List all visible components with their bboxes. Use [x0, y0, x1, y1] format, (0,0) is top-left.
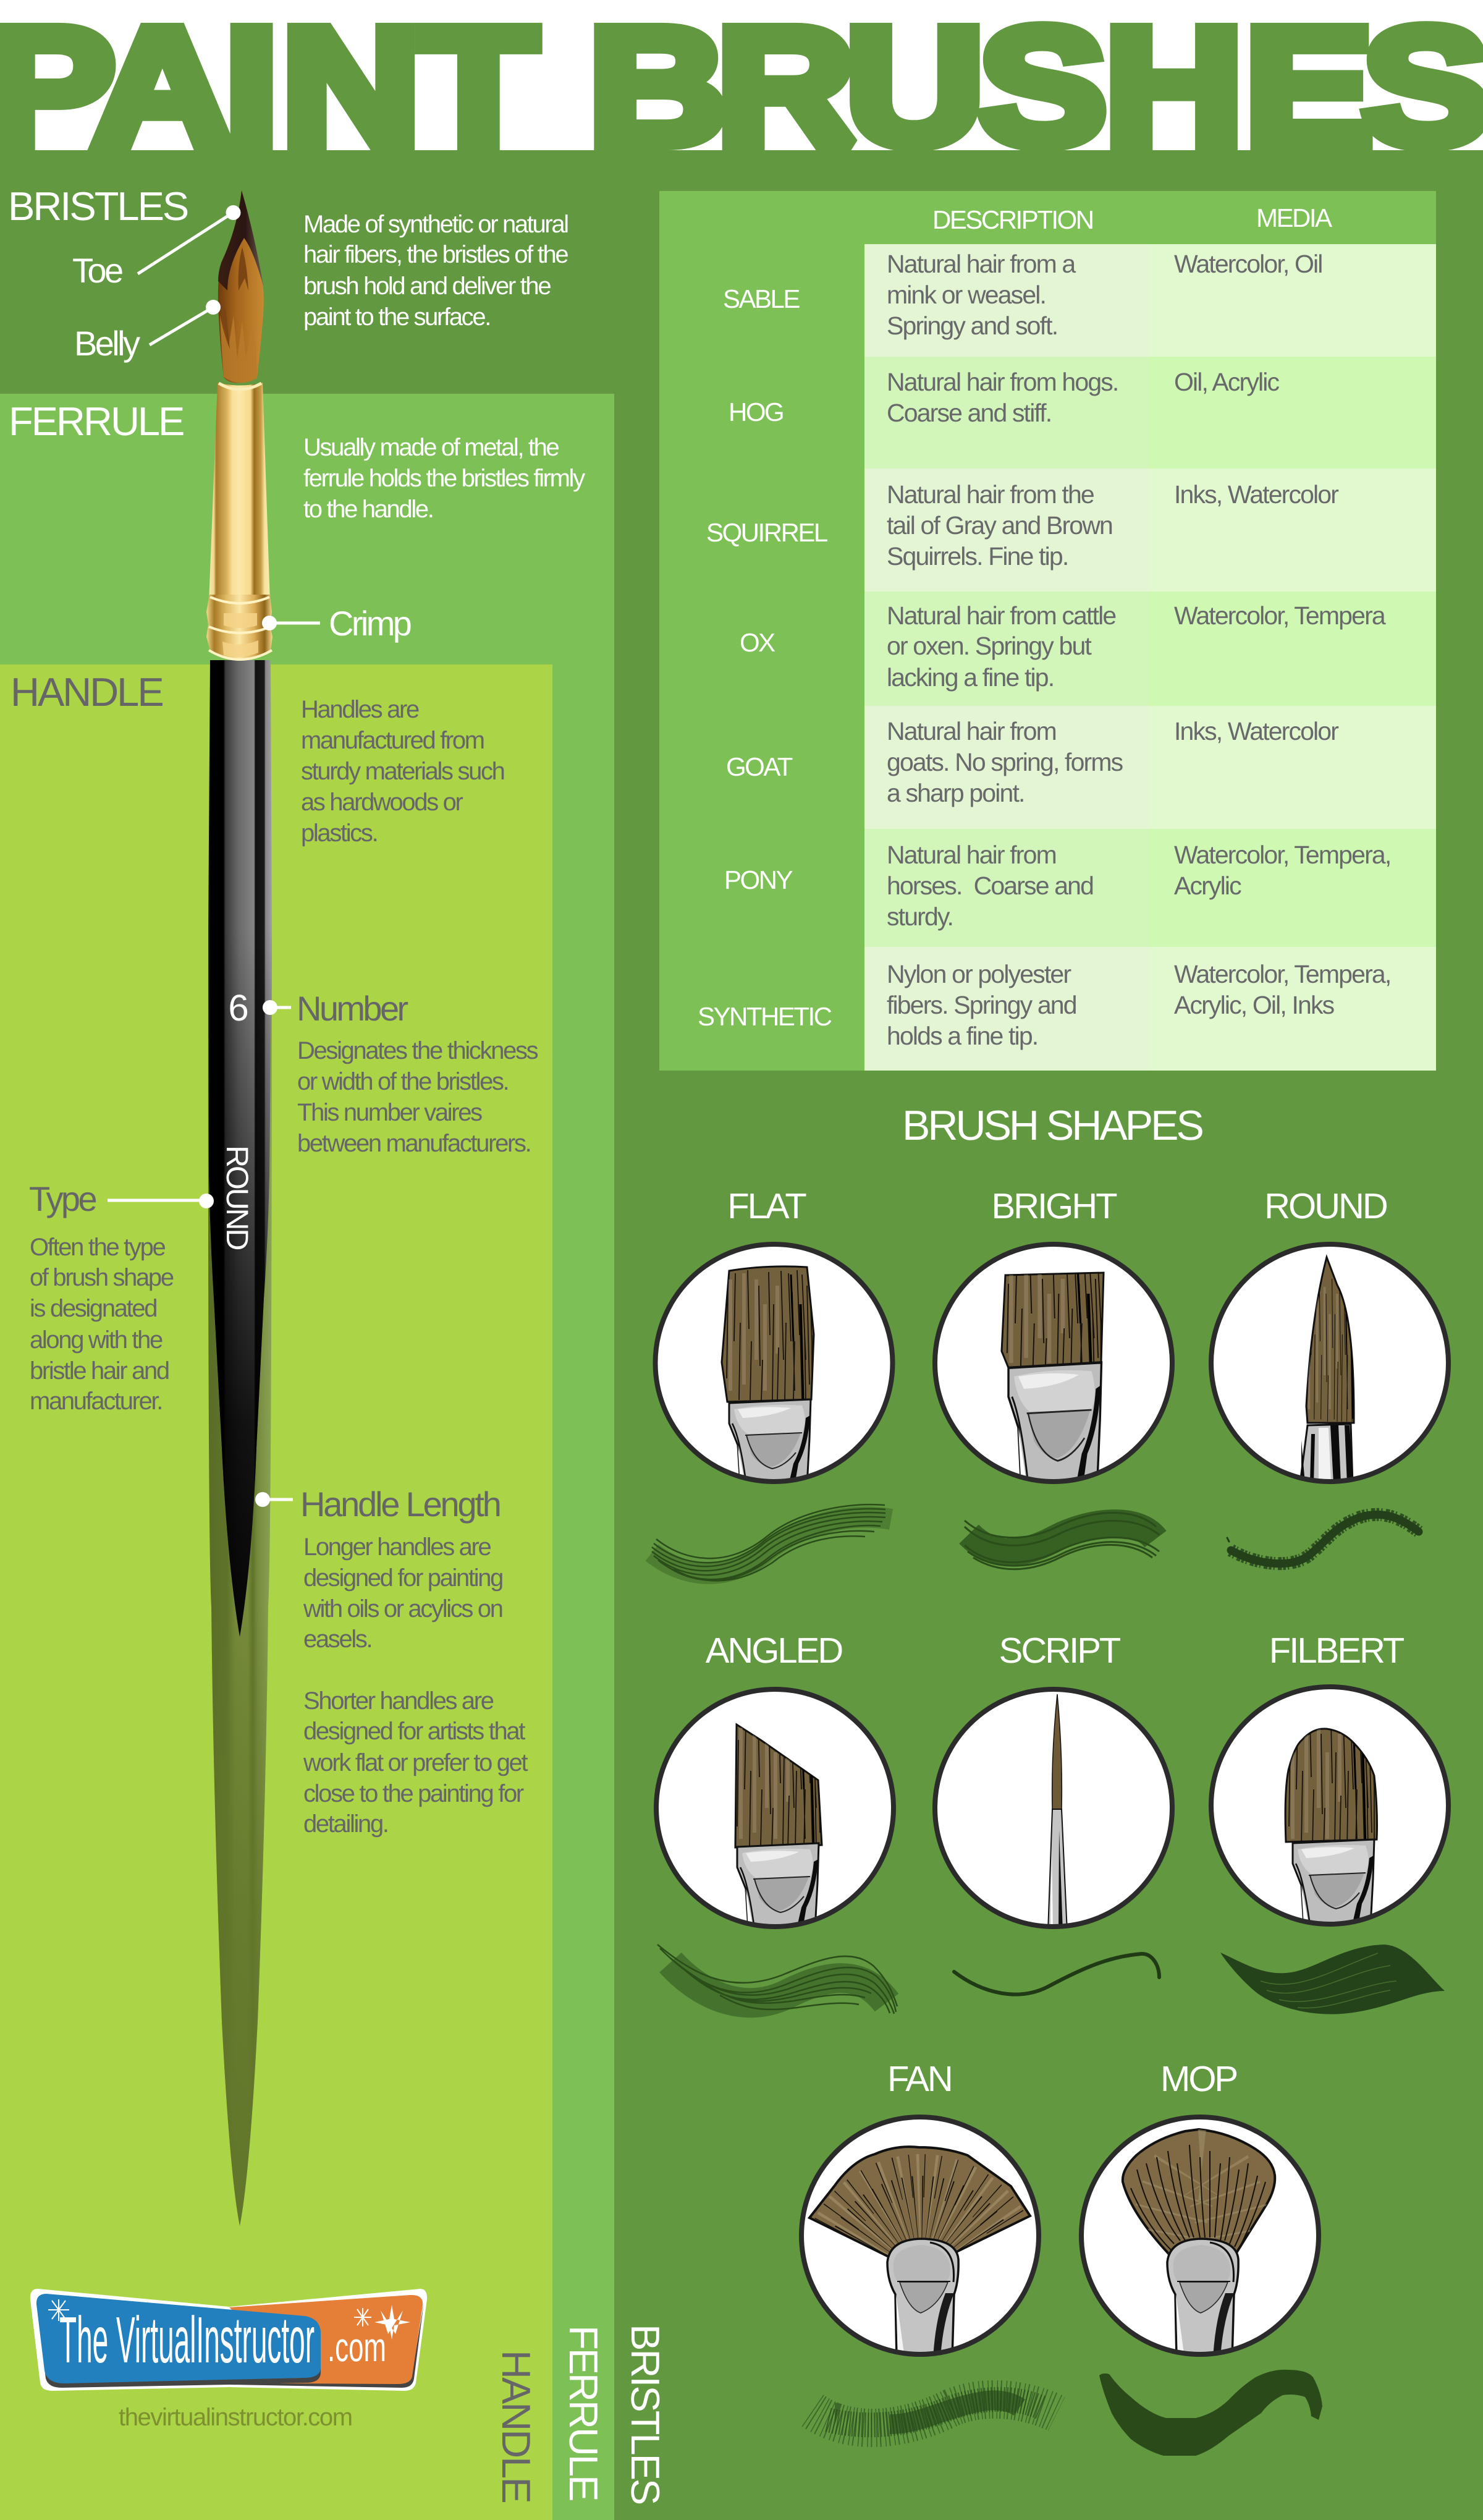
- logo: [30, 2289, 427, 2391]
- text: handle description: sturdy materials such: [301, 758, 504, 785]
- size number: 6: [228, 987, 249, 1029]
- row: squirrel: Inks, Watercolor: [1174, 480, 1338, 509]
- brush: flat: FLAT: [727, 1186, 806, 1226]
- ferrule body: [209, 383, 270, 603]
- brush: angled: ANGLED: [706, 1631, 842, 1671]
- crimp: [206, 595, 273, 660]
- row: goat: a sharp point.: [887, 779, 1025, 807]
- callout: handle length: Handle Length: [300, 1485, 500, 1524]
- row: sable: Watercolor, Oil: [1174, 250, 1322, 278]
- panel: handle: [0, 664, 552, 2520]
- row: synthetic: fibers. Springy and: [887, 991, 1076, 1019]
- row: synthetic: holds a fine tip.: [887, 1022, 1037, 1050]
- callout: number: or width of the bristles.: [297, 1068, 508, 1095]
- row: sable: Natural hair from a: [887, 250, 1076, 278]
- table headers: [932, 203, 1332, 234]
- callout: handle length: detailing.: [303, 1810, 388, 1838]
- callout: type: along with the: [30, 1326, 163, 1354]
- table headers: MEDIA: [1256, 203, 1332, 232]
- callout: handle length: close to the painting for: [303, 1780, 524, 1807]
- row: sable: Springy and soft.: [887, 312, 1057, 340]
- logo: The VirtualInstructor: [59, 2304, 315, 2377]
- row: pony: Natural hair from: [887, 841, 1056, 869]
- callout: type: Often the type: [30, 1234, 165, 1261]
- logo shadow: [36, 2302, 424, 2388]
- table headers: DESCRIPTION: [932, 205, 1093, 234]
- brush: round: ROUND: [1264, 1186, 1387, 1226]
- text: bristles description: Made of synthetic or natural: [303, 211, 568, 238]
- row: sable: SABLE: [723, 284, 800, 313]
- callout: toe: [72, 205, 241, 290]
- text: handle description: plastics.: [301, 820, 377, 847]
- bristle flames: [220, 315, 257, 383]
- stroke: filbert: [1220, 1945, 1445, 2014]
- callout: handle length: [255, 1485, 528, 1838]
- row: pony: PONY: [724, 865, 793, 894]
- row: synthetic: Acrylic, Oil, Inks: [1174, 991, 1335, 1019]
- brush: bright: BRIGHT: [991, 1186, 1117, 1226]
- panel: ferrule: [0, 394, 614, 2520]
- stroke: script: [954, 1954, 1159, 1995]
- brush: filbert: FILBERT: [1269, 1631, 1405, 1671]
- vertical label: bristles: BRISTLES: [623, 2324, 668, 2504]
- callout: number: Number: [297, 989, 408, 1028]
- handle fading shadow: [208, 927, 272, 2226]
- callout: number: Designates the thickness: [297, 1037, 538, 1064]
- stroke: bright: [965, 1512, 1159, 1569]
- title band: [0, 0, 1483, 150]
- brush: filbert: [1211, 1631, 1448, 1925]
- callout: handle length: easels.: [303, 1626, 371, 1653]
- handle shading: [208, 927, 272, 1637]
- callout: type: of brush shape: [30, 1264, 174, 1291]
- row: pony: Watercolor, Tempera,: [1174, 841, 1390, 869]
- table rows: [864, 244, 1436, 1071]
- callout: type: manufacturer.: [30, 1388, 162, 1415]
- heading: brush shapes: BRUSH SHAPES: [902, 1102, 1202, 1149]
- brush: script: [935, 1631, 1172, 1932]
- row: ox: lacking a fine tip.: [887, 663, 1054, 692]
- text: ferrule description: ferrule holds the bristles firmly: [303, 465, 585, 492]
- handle black body: [208, 660, 272, 1637]
- callout: crimp: Crimp: [329, 604, 411, 643]
- row: goat: Inks, Watercolor: [1174, 717, 1338, 745]
- row: synthetic: [698, 960, 1390, 1050]
- callout: type: [29, 1179, 214, 1415]
- row: ox: Natural hair from cattle: [887, 601, 1115, 630]
- bristles: [218, 190, 264, 383]
- row: ox: Watercolor, Tempera: [1174, 601, 1386, 630]
- row: pony: sturdy.: [887, 902, 953, 931]
- callout: number: This number vaires: [297, 1099, 482, 1126]
- row: goat: GOAT: [726, 752, 793, 781]
- crimp highlights: [209, 597, 272, 660]
- stroke: fan: [813, 2399, 1057, 2428]
- row: hog: Oil, Acrylic: [1174, 368, 1279, 396]
- callout: crimp: [262, 604, 411, 643]
- table background: [659, 191, 1436, 1071]
- callout: handle length: Longer handles are: [303, 1534, 491, 1561]
- logo blue tab: [36, 2294, 321, 2383]
- stroke: flat: [652, 1504, 891, 1580]
- heading: bristles: BRISTLES: [8, 184, 188, 229]
- logo outline: [30, 2289, 427, 2391]
- row: squirrel: SQUIRREL: [706, 518, 827, 547]
- callout: toe: Toe: [72, 251, 122, 290]
- logo orange tab: [229, 2295, 423, 2384]
- website url: thevirtualinstructor.com: [119, 2404, 352, 2431]
- text: ferrule description: [303, 434, 585, 523]
- row: goat: goats. No spring, forms: [887, 748, 1123, 776]
- brush: bright: [935, 1186, 1172, 1485]
- logo stars: [48, 2299, 371, 2327]
- illustration: round paint brush: [206, 190, 273, 2226]
- row: pony: [724, 841, 1390, 931]
- row: ox: or oxen. Springy but: [887, 632, 1092, 660]
- callout: handle length: designed for painting: [303, 1564, 502, 1592]
- text: handle description: [301, 696, 504, 847]
- crimp lozenges: [222, 613, 258, 657]
- logo blue tab shadow: [64, 2330, 321, 2387]
- row: synthetic: Watercolor, Tempera,: [1174, 960, 1390, 988]
- callout: number: [263, 989, 538, 1157]
- row: pony: horses. Coarse and: [887, 872, 1093, 900]
- callout: handle length: Shorter handles are: [303, 1687, 494, 1715]
- text: handle description: Handles are: [301, 696, 419, 723]
- stroke: round: [1227, 1514, 1419, 1564]
- ferrule rim: [219, 383, 261, 389]
- row: squirrel: tail of Gray and Brown: [887, 511, 1112, 540]
- callout: type: bristle hair and: [30, 1357, 169, 1385]
- row: goat: [726, 717, 1338, 807]
- text: bristles description: paint to the surface.: [303, 303, 490, 331]
- row: pony: Acrylic: [1174, 872, 1241, 900]
- table: hair types: [659, 191, 1436, 1071]
- brush: script: SCRIPT: [999, 1631, 1121, 1671]
- row: ox: OX: [740, 628, 775, 657]
- row: hog: HOG: [729, 397, 783, 426]
- row: ox: [740, 601, 1386, 692]
- vertical label: handle: HANDLE: [494, 2350, 539, 2502]
- text: ferrule description: to the handle.: [303, 496, 433, 523]
- brush: mop: MOP: [1160, 2059, 1236, 2099]
- logo .com: .com: [327, 2324, 386, 2370]
- text: bristles description: [303, 211, 568, 331]
- brush: mop: [1079, 2066, 1321, 2357]
- text: handle description: manufactured from: [301, 727, 484, 754]
- callout: belly: [74, 300, 221, 363]
- row: hog: [729, 368, 1279, 427]
- row: squirrel: [706, 480, 1338, 571]
- text: handle description: as hardwoods or: [301, 789, 463, 816]
- row: sable: mink or weasel.: [887, 281, 1046, 309]
- row: synthetic: Nylon or polyester: [887, 960, 1071, 988]
- row: goat: Natural hair from: [887, 717, 1056, 745]
- stroke: mop: [1099, 2370, 1322, 2456]
- row: squirrel: Squirrels. Fine tip.: [887, 542, 1068, 571]
- brush: fan: [801, 2059, 1039, 2374]
- callout: handle length: designed for artists that: [303, 1718, 525, 1745]
- brush: flat: [655, 1186, 892, 1485]
- brush: round: [1211, 1186, 1448, 1483]
- type text: ROUND: [220, 1145, 255, 1249]
- row: squirrel: Natural hair from the: [887, 480, 1094, 509]
- callout: type: is designated: [30, 1295, 156, 1322]
- callout: number: between manufacturers.: [297, 1130, 530, 1157]
- row: hog: Coarse and stiff.: [887, 399, 1051, 427]
- handle fade overlay: [211, 1607, 268, 2226]
- vertical label: ferrule: FERRULE: [561, 2325, 606, 2500]
- bristle tip: [218, 190, 263, 291]
- callout: handle length: work flat or prefer to get: [303, 1749, 528, 1776]
- callout: handle length: with oils or acylics on: [303, 1595, 502, 1623]
- row: synthetic: SYNTHETIC: [698, 1002, 832, 1031]
- stroke: angled: [657, 1945, 897, 2014]
- callout: belly: Belly: [74, 324, 140, 363]
- row: hog: Natural hair from hogs.: [887, 368, 1118, 396]
- text: bristles description: brush hold and deliver the: [303, 273, 551, 300]
- heading: handle: HANDLE: [11, 669, 163, 715]
- brush: angled: [656, 1631, 894, 1929]
- text: ferrule description: Usually made of metal, the: [303, 434, 559, 461]
- callout: type: Type: [29, 1179, 96, 1218]
- text: bristles description: hair fibers, the bristles of the: [303, 241, 568, 268]
- row: sable: [723, 250, 1322, 340]
- heading: ferrule: FERRULE: [9, 399, 184, 444]
- brush: fan: FAN: [887, 2059, 952, 2099]
